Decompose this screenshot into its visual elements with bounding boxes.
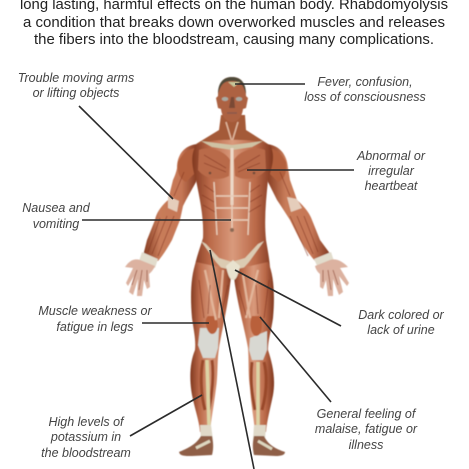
callout: nausea: Nausea and <box>22 201 91 215</box>
callout: nausea <box>22 201 231 231</box>
callout: trouble moving arms: Trouble moving arms <box>18 71 134 85</box>
callout: dark urine: lack of urine <box>367 323 435 337</box>
callout: muscle weakness: Muscle weakness or <box>38 304 152 318</box>
callout: fever <box>235 75 426 104</box>
callout: general malaise <box>260 317 418 452</box>
callout: abnormal heartbeat: irregular <box>368 164 415 178</box>
left arm <box>125 144 198 296</box>
callout: dark urine: Dark colored or <box>358 308 445 322</box>
torso <box>192 140 273 275</box>
callout: dark urine <box>235 270 445 337</box>
callout: muscle weakness: fatigue in legs <box>56 320 134 334</box>
callout: general malaise: illness <box>349 438 383 452</box>
callout: general malaise: General feeling of <box>317 407 417 421</box>
callout: high potassium: potassium in <box>50 430 121 444</box>
callout: trouble moving arms: or lifting objects <box>33 86 119 100</box>
callout: trouble moving arms <box>18 71 173 199</box>
right arm <box>266 144 349 296</box>
intro text <box>20 0 448 48</box>
callout: general malaise: malaise, fatigue or <box>315 422 418 436</box>
left leg <box>179 262 232 456</box>
callout: high potassium: the bloodstream <box>41 446 131 460</box>
right leg <box>233 262 285 456</box>
callout: abnormal heartbeat: heartbeat <box>365 179 418 193</box>
neck and traps <box>196 115 268 144</box>
intro text: a condition that breaks down overworked muscles and releases <box>23 14 445 31</box>
head <box>216 77 248 122</box>
intro text: the fibers into the bloodstream, causing many complications. <box>34 31 434 48</box>
pelvis <box>226 260 240 280</box>
callout: abnormal heartbeat: Abnormal or <box>356 149 426 163</box>
callout: muscle weakness <box>38 304 209 334</box>
callout line: continues below page <box>210 250 254 469</box>
callout: high potassium <box>41 395 202 460</box>
callout: abnormal heartbeat <box>247 149 426 193</box>
anatomical muscle figure <box>125 77 349 456</box>
callout: fever: Fever, confusion, <box>317 75 413 89</box>
callout: high potassium: High levels of <box>48 415 125 429</box>
callout: nausea: vomiting <box>33 217 79 231</box>
callout: fever: loss of consciousness <box>304 90 426 104</box>
